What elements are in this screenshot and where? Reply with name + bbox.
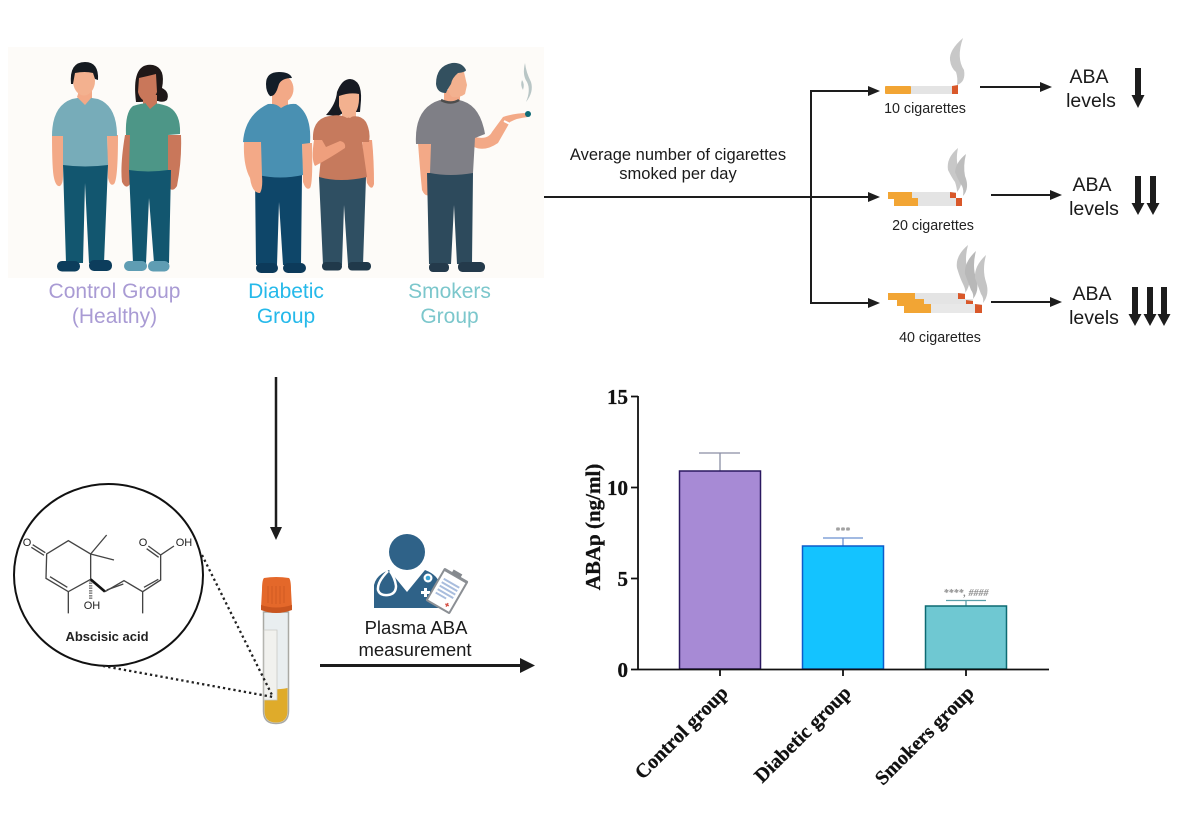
x axis labels: Control group [631, 682, 733, 784]
arrow: groups to blood sample [270, 377, 282, 540]
icon: three cigarettes [888, 245, 987, 313]
label: diabetic group: Diabetic [248, 280, 324, 303]
y axis numbers: 5 [618, 567, 628, 591]
person: smoker [416, 63, 532, 272]
icon: blood tube [261, 577, 292, 724]
bar: control [680, 471, 760, 669]
y axis numbers: 0 [618, 658, 628, 682]
label: control group: Control Group [49, 280, 180, 303]
arrow: to measurement chart [320, 658, 535, 673]
label: ABA levels 2: ABA [1072, 174, 1112, 196]
person: diabetic man [243, 72, 312, 273]
significance marks: ****, #### [944, 588, 990, 599]
text: average cigarettes per day: Average number of cigarettes [570, 146, 786, 164]
label: ABA levels 2: levels [1069, 198, 1119, 220]
label: smokers group: Group [420, 305, 479, 328]
molecule structure [31, 535, 174, 613]
x axis labels [631, 682, 979, 790]
axes [631, 396, 1049, 676]
bar chart: plasma ABA by group [581, 385, 1049, 790]
x axis labels: Diabetic group [750, 682, 856, 787]
clipboard [425, 565, 470, 614]
callout: abscisic acid molecule: OH [84, 600, 100, 612]
group labels [49, 280, 491, 328]
person: control woman [121, 65, 181, 272]
label: 20 cigarettes: 20 cigarettes [892, 218, 974, 234]
label: ABA levels 1: levels [1066, 90, 1116, 112]
callout: abscisic acid molecule: O [139, 537, 148, 549]
icon: triple down arrow [1128, 287, 1170, 326]
significance marks [836, 526, 990, 599]
text: average cigarettes per day: smoked per day [619, 165, 737, 183]
label: control group: (Healthy) [72, 305, 157, 328]
label: smokers group: Smokers [408, 280, 491, 303]
label: ABA levels 3: levels [1069, 307, 1119, 329]
label: ABA levels 1: ABA [1069, 66, 1109, 88]
label: ABA levels 3: ABA [1072, 283, 1112, 305]
y axis numbers: 10 [607, 476, 628, 500]
icon: one cigarette [885, 38, 964, 94]
significance marks: *** [836, 526, 850, 537]
arrow: 40 cigarettes to ABA [991, 301, 1050, 303]
person: diabetic woman [313, 79, 374, 270]
icon: two cigarettes [888, 148, 967, 206]
label: 10 cigarettes: 10 cigarettes [884, 101, 966, 117]
bar: diabetic [802, 546, 884, 669]
y axis numbers [607, 385, 628, 682]
callout: abscisic acid molecule: OH [176, 537, 192, 549]
arrow: 20 cigarettes to ABA [991, 194, 1050, 196]
label: 40 cigarettes: 40 cigarettes [899, 330, 981, 346]
y axis title: ABAp (ng/ml) [581, 464, 605, 590]
arrows: branching to cigarette amounts [544, 91, 868, 303]
label: diabetic group: Group [257, 305, 315, 328]
icon: double down arrow [1132, 176, 1160, 215]
icon: single down arrow [1132, 68, 1144, 108]
y axis numbers: 15 [607, 385, 628, 409]
panel: study groups illustration [8, 47, 544, 278]
person: control man [52, 62, 118, 272]
callout: abscisic acid molecule [14, 484, 203, 666]
icon: doctor with clipboard [374, 534, 470, 614]
dotted zoom lines [103, 555, 273, 697]
label: abscisic acid: Abscisic acid [65, 629, 149, 644]
error bars [699, 453, 986, 606]
x axis labels: Smokers group [871, 682, 979, 790]
bar: smokers [926, 606, 1006, 669]
arrow: 10 cigarettes to ABA [980, 86, 1040, 88]
label: plasma ABA measurement: measurement [358, 639, 472, 660]
callout: abscisic acid molecule: O [23, 537, 32, 549]
label: plasma ABA measurement: Plasma ABA [365, 617, 467, 638]
